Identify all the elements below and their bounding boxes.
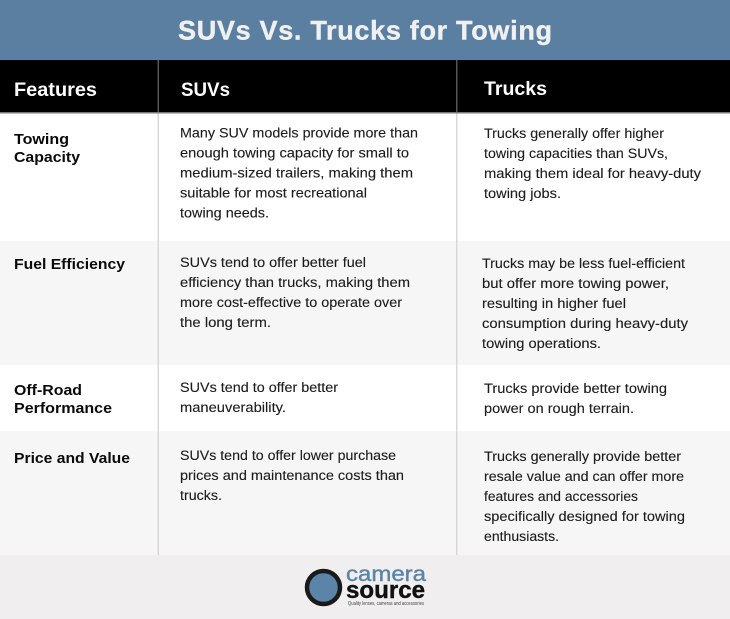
row: off-road performance: SUVs tend to offer better xyxy=(180,380,339,395)
row: price and value: resale value and can offer more xyxy=(484,469,684,484)
logo wordmark: source xyxy=(346,577,425,604)
row: towing capacity: Towing xyxy=(14,131,69,148)
row: price and value xyxy=(0,431,730,555)
title banner: SUVs Vs. Trucks for Towing xyxy=(178,16,552,46)
row: price and value: trucks. xyxy=(180,488,222,503)
row: fuel efficiency: more cost-effective to operate over xyxy=(180,295,403,310)
row: fuel efficiency xyxy=(0,241,730,365)
logo wordmark: Quality lenses, cameras and accessories xyxy=(348,601,424,607)
row: fuel efficiency: Trucks may be less fuel-efficient xyxy=(482,256,685,271)
row: towing capacity: towing jobs. xyxy=(484,186,561,201)
row: price and value: prices and maintenance costs than xyxy=(180,468,404,483)
row: fuel efficiency: towing operations. xyxy=(482,336,601,351)
table header row: SUVs xyxy=(181,80,230,101)
row: fuel efficiency: resulting in higher fuel xyxy=(482,296,626,311)
logo wordmark xyxy=(346,562,426,607)
table header row xyxy=(0,60,730,113)
row: fuel efficiency: Fuel Efficiency xyxy=(14,256,126,273)
row: off-road performance: maneuverability. xyxy=(180,400,286,415)
logo wordmark: camera xyxy=(346,562,426,586)
row: towing capacity: towing needs. xyxy=(180,206,269,220)
row: towing capacity: Trucks generally offer higher xyxy=(484,126,665,141)
row: price and value: enthusiasts. xyxy=(484,529,559,544)
row: towing capacity xyxy=(0,113,730,241)
table header row: Features xyxy=(14,80,97,101)
row: off-road performance: Performance xyxy=(14,400,112,417)
footer band with logo xyxy=(0,555,730,619)
row: fuel efficiency: efficiency than trucks, making them xyxy=(180,275,410,290)
row: off-road performance: Trucks provide better towing xyxy=(484,381,667,396)
row: off-road performance: Off-Road xyxy=(14,382,82,399)
row: fuel efficiency: SUVs tend to offer better fuel xyxy=(180,255,366,270)
row: price and value: Trucks generally provide better xyxy=(484,449,682,464)
row: fuel efficiency: the long term. xyxy=(180,315,271,330)
logo icon: camera lens xyxy=(307,571,340,604)
row: off-road performance: power on rough terrain. xyxy=(484,401,634,416)
row: price and value: specifically designed for towing xyxy=(484,509,685,524)
row: off-road performance xyxy=(0,365,730,431)
row: price and value: SUVs tend to offer lower purchase xyxy=(180,448,396,463)
row: towing capacity: suitable for most recreational xyxy=(180,186,367,200)
title banner xyxy=(0,0,730,60)
row: towing capacity: Many SUV models provide more than xyxy=(180,126,418,140)
row: towing capacity: making them ideal for heavy-duty xyxy=(484,166,701,181)
row: fuel efficiency: consumption during heavy-duty xyxy=(482,316,688,331)
row: price and value: features and accessories xyxy=(484,489,638,504)
row: towing capacity: towing capacities than SUVs, xyxy=(484,146,668,161)
row: towing capacity: Capacity xyxy=(14,149,81,166)
row: towing capacity: medium-sized trailers, making them xyxy=(180,166,413,180)
table header row: Trucks xyxy=(484,79,547,100)
row: towing capacity: enough towing capacity for small to xyxy=(180,146,409,160)
row: price and value: Price and Value xyxy=(14,450,130,467)
row: fuel efficiency: but offer more towing power, xyxy=(482,276,669,291)
